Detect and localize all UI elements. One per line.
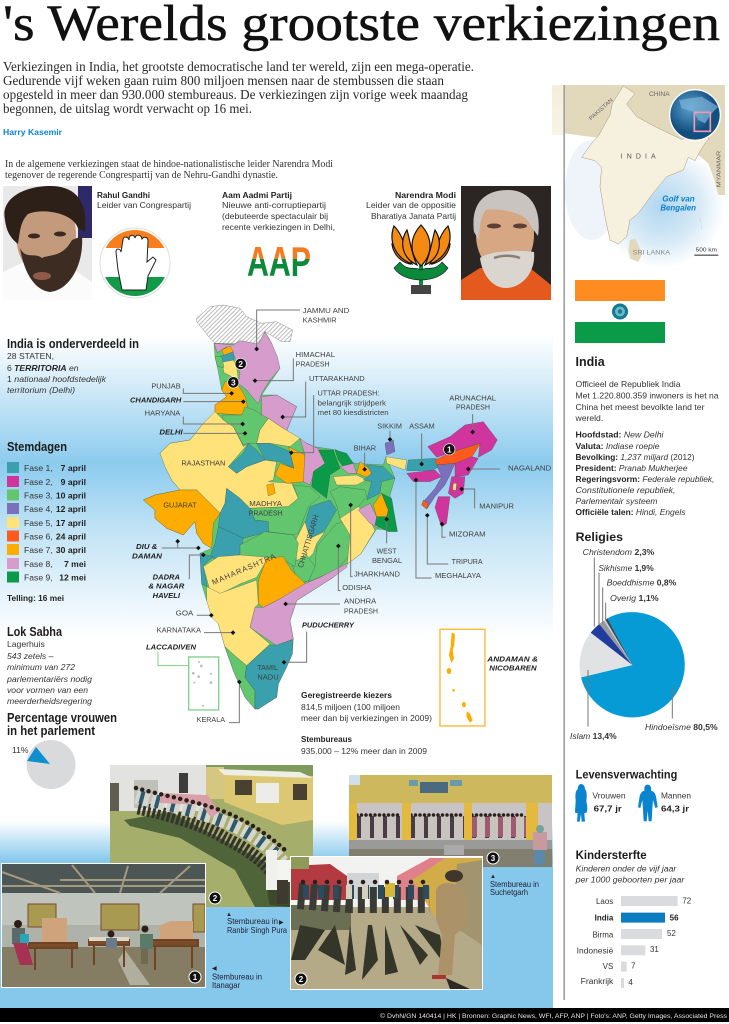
legend: voting days: 9 april	[61, 477, 86, 487]
legend: voting days: Fase 3,	[24, 490, 53, 500]
country facts: wereld.	[574, 413, 603, 423]
legend: voting days: 30 april	[56, 545, 86, 555]
state labels: NICOBAREN	[489, 664, 537, 673]
legend: voting days: Fase 8,	[24, 559, 53, 569]
caption: Suchetgarh: Suchetgarh	[490, 888, 528, 897]
map of India	[130, 305, 552, 726]
state regions	[143, 305, 497, 709]
photo badge 2b	[295, 973, 307, 985]
icon: woman	[575, 784, 587, 822]
child mortality bar chart: per 1000 geboorten per jaar	[575, 876, 685, 885]
background gradient panel	[0, 335, 553, 1010]
footer credits	[0, 1008, 729, 1022]
locator map: PAKISTAN	[588, 98, 615, 122]
caption: Itanagar: Itanagar	[212, 981, 240, 990]
life expectancy: Mannen	[661, 792, 691, 801]
life expectancy: Vrouwen	[592, 792, 626, 801]
panel: Lok Sabha: parlementariërs nodig	[6, 674, 92, 684]
leader: Narendra Modi	[366, 190, 456, 221]
panel: women in parliament: Percentage vrouwen	[7, 711, 117, 725]
religions pie chart: Overig 1,1%	[610, 594, 659, 603]
panel: Lok Sabha: meerderheidsregering	[7, 696, 92, 706]
panel: Lok Sabha: Lagerhuis	[7, 639, 45, 649]
state labels: HIMACHAL	[296, 350, 335, 359]
panel: women in parliament: in het parlement	[7, 724, 96, 738]
caption: Suchetgarh: ▲	[490, 874, 496, 880]
country facts: Bevolking: 1,237 miljard (2012)	[576, 452, 695, 462]
religions pie chart: Religies	[576, 530, 623, 544]
leader: Narendra Modi: Bharatiya Janata Partij	[371, 211, 456, 221]
leader: Aam Aadmi Partij: recente verkiezingen in Delhi,	[222, 222, 335, 232]
panel: women in parliament: 11%	[12, 745, 29, 755]
legend: voting days: Stemdagen	[7, 440, 67, 454]
locator map: CHINA	[649, 92, 670, 98]
religions pie chart: Islam 13,4%	[570, 732, 617, 741]
panel: states summary: 6 TERRITORIA en	[7, 363, 79, 373]
child mortality bar chart: 31	[650, 945, 659, 954]
registered voters: meer dan bij verkiezingen in 2009)	[301, 713, 432, 723]
legend: voting days: Fase 9,	[24, 572, 53, 582]
leader end markers	[175, 347, 475, 684]
state labels: CHHATTISGARH	[296, 514, 321, 569]
caption: Ranbir Singh Pura: Stembureau in	[227, 917, 278, 926]
state labels: PUDUCHERRY	[302, 621, 355, 630]
logo: AAP: AAP	[247, 238, 311, 285]
marker: 2	[235, 358, 246, 370]
photo badge 3: 3	[491, 854, 496, 863]
caption: Suchetgarh: Stembureau in	[490, 880, 539, 889]
state labels: HARYANA	[145, 409, 181, 418]
state labels	[130, 306, 552, 724]
religions pie chart: Boeddhisme 0,8%	[607, 578, 676, 587]
state labels: SIKKIM	[377, 421, 402, 430]
icon: man	[638, 785, 658, 821]
state labels: MEGHALAYA	[435, 571, 482, 580]
polling stations	[301, 734, 427, 756]
photo badge 1: 1	[193, 973, 198, 982]
child mortality bar chart: Laos	[596, 897, 613, 906]
leader: Rahul Gandhi: Leider van Congrespartij	[97, 200, 191, 210]
country facts: President: Pranab Mukherjee	[576, 463, 688, 473]
state labels: DELHI	[159, 427, 184, 436]
locator map: SRI LANKA	[633, 249, 671, 256]
country facts: Officiële talen: Hindi, Engels	[576, 507, 686, 517]
child mortality bar chart: 4	[628, 978, 633, 987]
state labels: TRIPURA	[452, 557, 483, 566]
state labels: ODISHA	[342, 583, 372, 592]
life expectancy: 64,3 jr	[661, 803, 690, 813]
state labels: HAVELI	[153, 591, 181, 600]
leader lines	[162, 310, 500, 723]
locator map: Bengalen	[660, 204, 696, 213]
photo: Narendra Modi	[461, 186, 551, 300]
intro text: begonnen, de uitslag wordt verwacht op 16 mei.	[3, 101, 252, 116]
byline: Harry Kasemir	[3, 127, 63, 137]
state labels: PUNJAB	[151, 381, 181, 390]
state labels: belangrijk strijdperk	[318, 399, 386, 408]
photo badge 2b: 2	[299, 975, 304, 984]
panel: states summary: India is onderverdeeld in	[7, 337, 139, 351]
leader: Aam Aadmi Partij: (debuteerde spectaculair bij	[222, 211, 328, 221]
child mortality bar chart: Kinderen onder de vijf jaar	[576, 864, 677, 873]
state labels: BIHAR	[354, 443, 376, 452]
legend: voting days: 12 mei	[59, 572, 86, 582]
caption: Itanagar: ◀	[212, 966, 217, 972]
panel: states summary: territorium (Delhi)	[7, 385, 75, 395]
intro text: Gedurende vijf weken gaan ruim 800 miljoen mensen naar de stembussen die staan	[3, 73, 444, 88]
state labels: PRADESH	[456, 403, 490, 412]
leader: Aam Aadmi Partij: Aam Aadmi Partij	[222, 190, 292, 200]
photo badge 1	[189, 971, 201, 983]
state labels: TAMIL	[257, 663, 278, 672]
locator map: INDIA	[621, 153, 656, 160]
state labels: BENGAL	[372, 556, 402, 565]
state labels: KASHMIR	[303, 315, 337, 324]
leaders intro	[5, 159, 333, 181]
legend: voting days	[7, 440, 86, 603]
leader: Narendra Modi: Narendra Modi	[395, 190, 456, 200]
panel: Lok Sabha: 543 zetels –	[7, 651, 54, 661]
child mortality bar chart: VS	[603, 962, 613, 971]
panel: states summary: 1 nationaal hoofdstedelijk	[7, 374, 107, 384]
globe	[669, 89, 721, 141]
state labels: GOA	[176, 609, 194, 618]
state labels: DIU &	[136, 542, 158, 551]
panel: Lok Sabha: voor vormen van een	[7, 685, 88, 695]
religions pie chart	[570, 530, 718, 741]
locator map: MYANMAR	[717, 151, 723, 187]
intro text: Verkiezingen in India, het grootste democratische land ter wereld, zijn een mega-operatie.	[3, 59, 474, 74]
state labels: ARUNACHAL	[449, 393, 496, 402]
legend: voting days: Fase 1,	[24, 463, 53, 473]
state labels: met 80 kiesdistricten	[318, 408, 389, 417]
child mortality bar chart: 7	[631, 961, 636, 970]
panel: Lok Sabha: minimum van 272	[7, 662, 75, 672]
state labels: DAMAN	[132, 551, 162, 560]
caption: Ranbir Singh Pura: ▲	[226, 912, 232, 918]
panel: states summary	[7, 337, 139, 395]
state labels: KARNATAKA	[157, 626, 202, 635]
state labels: ANDHRA	[344, 597, 377, 606]
photo badge 3	[487, 852, 499, 864]
legend: voting days: 7 mei	[64, 559, 86, 569]
child mortality bar chart: 72	[682, 897, 692, 906]
state labels: & NAGAR	[148, 582, 185, 591]
polling stations: 935.000 – 12% meer dan in 2009	[301, 746, 427, 756]
legend: voting days: Fase 6,	[24, 532, 53, 542]
legend: voting days: 24 april	[56, 532, 86, 542]
registered voters	[301, 690, 432, 723]
state labels: KERALA	[197, 715, 226, 724]
intro text	[3, 59, 474, 116]
state labels: LACCADIVEN	[146, 643, 196, 652]
legend: voting days: Fase 5,	[24, 518, 53, 528]
right column divider	[552, 85, 564, 135]
state labels: NAGALAND	[508, 463, 552, 472]
footer credits: © DvhN/GN 140414 | HK | Bronnen: Graphic News, WFI, AFP, ANP | Foto's: ANP, Getty Images, Associated Press	[380, 1012, 728, 1020]
logo: BJP lotus	[392, 225, 450, 294]
state labels: RAJASTHAN	[181, 458, 225, 467]
marker: 3: 3	[231, 377, 236, 387]
country facts: Constitutionele republiek,	[576, 485, 676, 495]
state labels: PRADESH	[296, 359, 330, 368]
flag of India	[575, 280, 665, 343]
panel: Lok Sabha: Lok Sabha	[7, 625, 63, 639]
life expectancy: 67,7 jr	[594, 803, 622, 813]
caption: Itanagar: Stembureau in	[212, 972, 262, 982]
state labels: MAHARASHTRA	[211, 551, 278, 587]
religions pie chart: Christendom 2,3%	[583, 548, 654, 557]
panel: states summary: 28 STATEN,	[7, 351, 54, 361]
country facts	[574, 355, 719, 517]
country facts: China het meest bevolkte land ter	[576, 402, 705, 412]
life expectancy	[575, 767, 691, 822]
legend: voting days: 12 april	[56, 504, 86, 514]
state labels: MIZORAM	[449, 530, 486, 539]
state labels: UTTARAKHAND	[309, 374, 365, 383]
caption: Itanagar	[212, 966, 262, 990]
legend: voting days: Fase 7,	[24, 545, 53, 555]
leader: Rahul Gandhi	[97, 190, 191, 210]
leader: Rahul Gandhi: Rahul Gandhi	[97, 190, 150, 200]
panel: women in parliament	[7, 711, 117, 789]
registered voters: Geregistreerde kiezers	[301, 690, 392, 700]
child mortality bar chart: Indonesië	[577, 946, 614, 955]
locator map	[565, 85, 725, 272]
logo: Congress hand	[100, 228, 170, 298]
state labels: WEST	[377, 547, 397, 556]
state labels: JHARKHAND	[354, 570, 400, 579]
child mortality bar chart: Birma	[592, 930, 614, 939]
legend: voting days: Telling: 16 mei	[7, 593, 64, 603]
locator map: 500 km	[696, 247, 717, 253]
photo: Ranbir Singh Pura queue	[110, 765, 313, 907]
child mortality bar chart: Kindersterfte	[576, 848, 647, 862]
state labels: MANIPUR	[479, 502, 514, 511]
child mortality bar chart: India	[595, 914, 614, 923]
country facts: Hoofdstad: New Delhi	[576, 430, 665, 440]
legend: voting days: 17 april	[56, 518, 86, 528]
state labels: JAMMU AND	[303, 306, 350, 315]
child mortality bar chart: 52	[667, 929, 676, 938]
marker: 2: 2	[238, 359, 243, 369]
photo badge 2	[209, 892, 221, 904]
photo: Suchetgarh polling station	[349, 775, 552, 867]
polling stations: Stembureaus	[301, 734, 352, 744]
marker: 1	[444, 444, 455, 455]
state labels: CHANDIGARH	[130, 395, 182, 404]
country facts: Met 1.220.800.359 inwoners is het na	[576, 390, 719, 400]
leaders intro: In de algemene verkiezingen staat de hindoe-nationalistische leider Narendra Modi	[5, 159, 333, 170]
country facts: Valuta: Indiase roepie	[576, 441, 660, 451]
intro text: opgesteld in meer dan 930.000 stembureaus. De verkiezingen zijn vorige week maandag	[3, 87, 468, 102]
state labels: DADRA	[153, 572, 180, 581]
child mortality bar chart	[575, 848, 692, 988]
caption: Ranbir Singh Pura: Ranbir Singh Pura	[227, 926, 288, 935]
state labels: ASSAM	[409, 421, 435, 430]
registered voters: 814,5 miljoen (100 miljoen	[301, 702, 400, 712]
caption: Ranbir Singh Pura: ▶	[279, 920, 284, 926]
locator map: Golf van	[662, 195, 695, 204]
life expectancy: Levensverwachting	[576, 767, 677, 781]
country facts: Parlementair systeem	[576, 496, 658, 506]
photo: second Ranbir Singh Pura queue	[290, 856, 500, 990]
inset: Laccadiven	[158, 652, 219, 710]
state labels: PRADESH	[249, 508, 283, 517]
photo: Itanagar polling station	[1, 863, 206, 988]
legend: voting days: 10 april	[56, 490, 86, 500]
caption: Suchetgarh	[490, 874, 539, 897]
leader: Narendra Modi: Leider van de oppositie	[366, 200, 456, 210]
country facts: Regeringsvorm: Federale republiek,	[576, 474, 714, 484]
legend: voting days: Fase 2,	[24, 477, 53, 487]
country facts: India	[576, 355, 606, 369]
country facts: Officieel de Republiek India	[576, 379, 681, 389]
marker: 1: 1	[447, 444, 452, 454]
photo badge 2: 2	[213, 894, 218, 903]
leaders intro: tegenover de regerende Congrespartij van de Nehru-Gandhi dynastie.	[5, 170, 278, 181]
leader: Aam Aadmi Partij	[222, 190, 335, 232]
state labels: UTTAR PRADESH:	[318, 389, 379, 398]
child mortality bar chart: Frankrijk	[581, 977, 613, 986]
legend: voting days: Fase 4,	[24, 504, 53, 514]
photo: Rahul Gandhi	[3, 186, 92, 300]
inset: Andaman and Nicobar	[440, 629, 485, 726]
legend: voting days: 7 april	[61, 463, 86, 473]
marker: 3	[228, 377, 239, 388]
child mortality bar chart: 56	[670, 914, 679, 923]
state labels: NADU	[257, 672, 279, 681]
state labels: ANDAMAN &	[486, 654, 538, 663]
leader: Aam Aadmi Partij: Nieuwe anti-corruptiepartij	[222, 200, 326, 210]
religions pie chart: Hindoeïsme 80,5%	[645, 723, 718, 732]
religions pie chart: Sikhisme 1,9%	[598, 564, 654, 573]
state labels: MADHYA	[249, 499, 283, 508]
state labels: PRADESH	[344, 606, 378, 615]
panel: Lok Sabha	[6, 625, 92, 706]
state labels: GUJARAT	[163, 500, 197, 509]
caption: Ranbir Singh Pura	[226, 912, 288, 935]
